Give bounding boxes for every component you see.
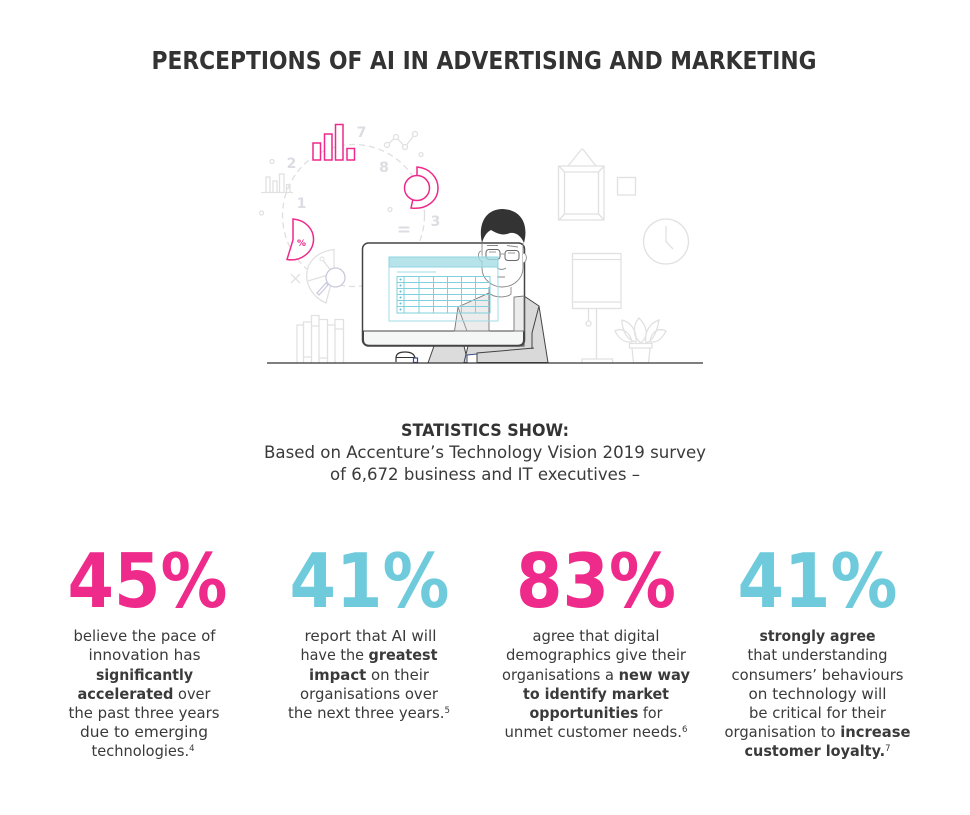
stat 4: 41%: 7 [885,744,890,754]
intro text: Based on Accenture’s Technology Vision 2019 survey [264,443,706,463]
stat 4: 41%: 41% [738,537,898,625]
stat 2: 41%: organisations over [300,685,439,703]
stat 3: 83%: organisations a new way [502,666,690,684]
stat 2: 41%: the next three years. [288,704,451,722]
stat 1: 45%: 45% [68,537,228,625]
stat 1: 45%: technologies. [92,742,195,760]
stat 3: 83% [502,537,690,741]
stat 1: 45%: 4 [189,744,195,754]
title: PERCEPTIONS OF AI IN ADVERTISING AND MARKETING [152,46,816,75]
icon: pink percent gauge: % [297,239,306,249]
stat 3: 83%: 83% [516,537,676,625]
stat 2: 41%: 5 [444,706,450,716]
stat 4: 41%: consumers’ behaviours [732,666,904,684]
stat 1: 45%: due to emerging [80,723,208,741]
icon: small grey bar chart [261,174,293,192]
stat 2: 41%: impact on their [309,666,430,684]
person: jacket outside the monitor [464,296,548,362]
icon: pink bar chart [313,124,354,160]
stat 2: 41%: 41% [290,537,450,625]
decorative numerals: 2 [287,156,296,172]
stat 4: 41%: strongly agree [760,627,876,645]
icon: potted plant [615,318,666,363]
stat 1: 45% [68,537,228,760]
stat 3: 83%: to identify market [523,685,670,703]
stat 2: 41%: report that AI will [304,627,436,645]
icon: mouse [396,352,418,362]
stat 4: 41% [724,537,910,760]
stat 1: 45%: accelerated over [78,685,211,703]
stat 1: 45%: innovation has [88,646,200,664]
stat 4: 41%: customer loyalty. [744,742,885,760]
icon: grey line chart [384,132,418,150]
monitor stand [428,346,468,363]
person: translucent jacket through the monitor [454,293,524,331]
stat 2: 41% [288,537,450,722]
decorative numerals: 7 [357,125,366,141]
desk line [267,362,703,364]
stat 4: 41%: be critical for their [749,704,887,722]
stat 3: 83%: agree that digital [532,627,660,645]
stat 4: 41%: organisation to increase [724,723,910,741]
icon: picture frame [558,149,604,220]
person: shirt cuff and arm [467,306,539,363]
stat 4: 41%: that understanding [748,646,888,664]
icon: books [297,316,344,363]
intro text [264,421,706,485]
stat 4: 41%: on technology will [748,685,886,703]
stat 1: 45%: the past three years [68,704,220,722]
icon: pink donut gauge [404,167,438,208]
decorative numerals: 1 [297,196,306,212]
stat 2: 41%: have the greatest [300,646,438,664]
stat 1: 45%: significantly [96,666,193,684]
intro text: STATISTICS SHOW: [401,421,569,440]
decorative numerals: 3 [431,214,440,230]
intro text: of 6,672 business and IT executives – [330,465,640,485]
icon: small square frame [618,178,636,195]
person: head [479,209,526,297]
icon: pink percent gauge [287,219,314,260]
dashed data ring [282,144,424,286]
decorative numerals: = [397,220,411,240]
decorative numerals [287,125,440,240]
stat 3: 83%: demographics give their [506,646,687,664]
decorative numerals: 8 [379,160,389,176]
stat 1: 45%: believe the pace of [74,627,216,645]
stat 3: 83%: opportunities for [530,704,663,722]
stat 3: 83%: unmet customer needs. [504,723,689,741]
icon: floor lamp [572,254,621,363]
monitor [362,243,524,346]
icon: magnifier and radar fan [307,250,345,303]
stat 3: 83%: 6 [682,725,688,735]
icon: clock [644,219,688,264]
spreadsheet on screen [389,257,498,321]
illustration: analyst at desk [260,124,703,363]
small dots and cross [260,152,423,283]
